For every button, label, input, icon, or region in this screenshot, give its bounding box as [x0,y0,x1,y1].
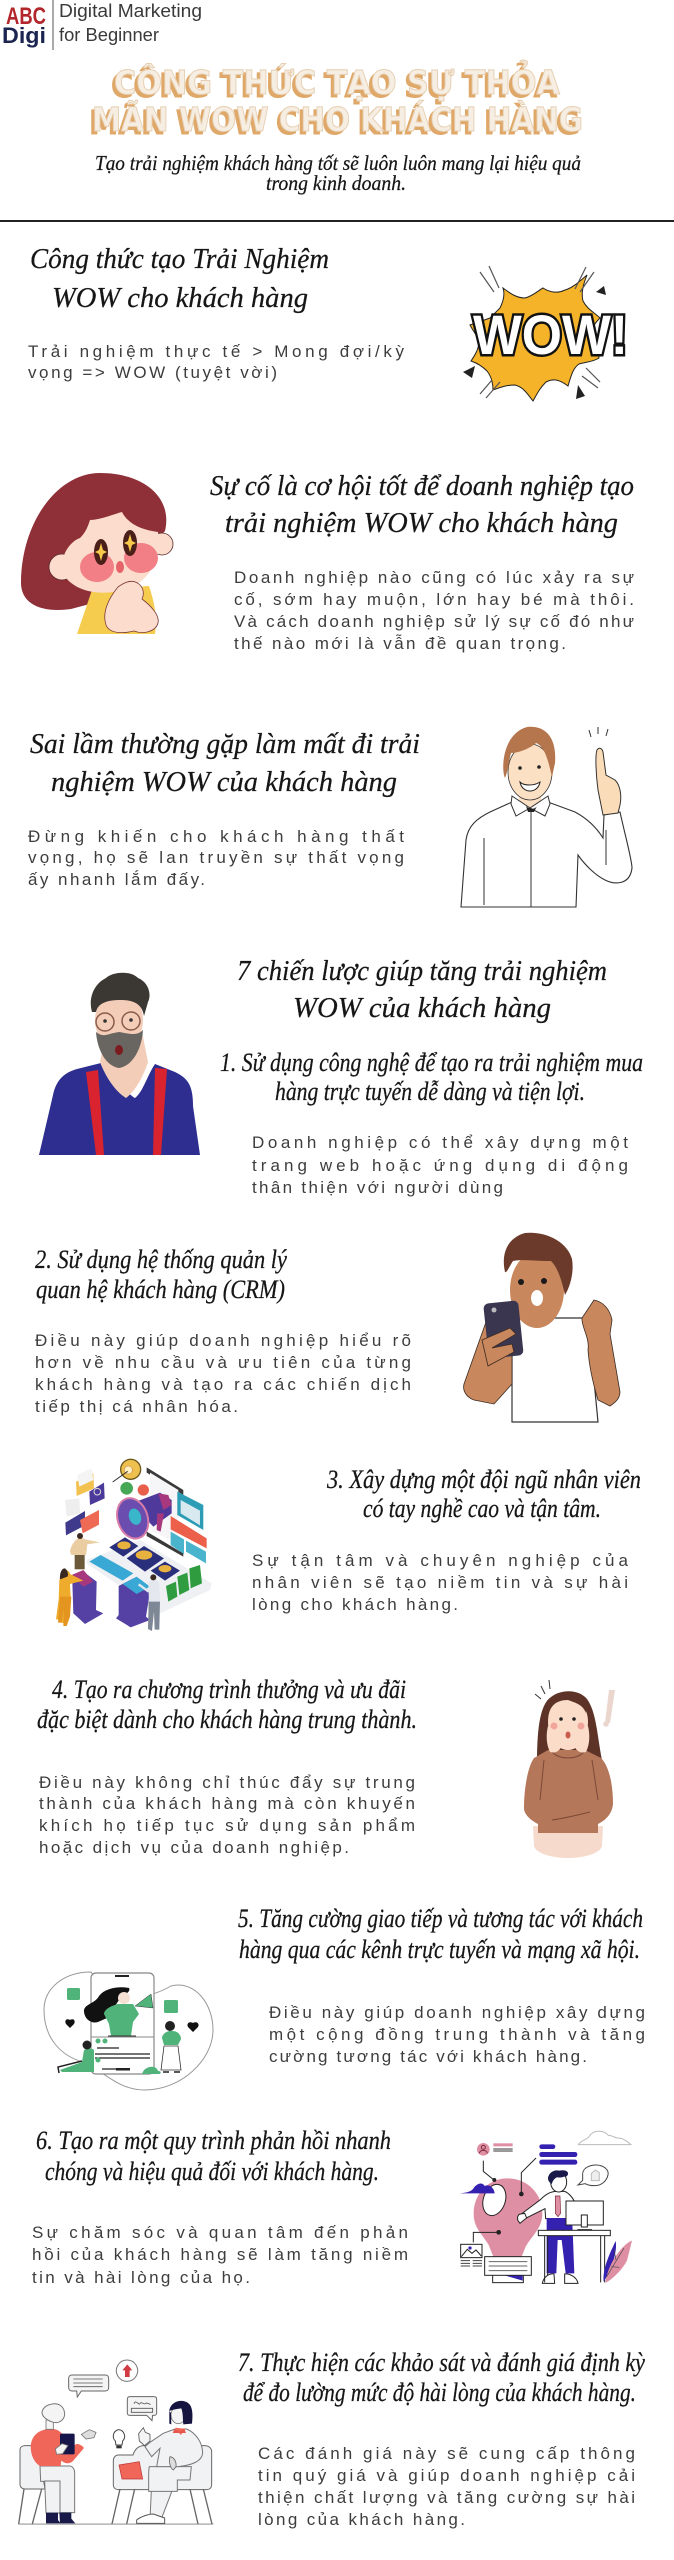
icon: WOW burst [463,266,628,401]
text: strategy 3: Sự tận tâm và chuyên nghiệp của [252,1551,629,1570]
illustration: two people talking [18,2360,213,2525]
text: strategy 6: tin và hài lòng của họ. [32,2268,250,2287]
heading: strategy 5 [238,1904,643,1964]
heading: common mistakes [30,728,420,798]
heading: WOW formula: Công thức tạo Trải Nghiệm [30,243,329,275]
text: strategy 4: khích họ tiếp tục sử dụng sản phẩm [39,1816,415,1835]
heading: strategy 3 [326,1465,641,1523]
heading: strategy 2: quan hệ khách hàng (CRM) [36,1275,285,1304]
text: strategy 7: Các đánh giá này sẽ cung cấp thông [258,2444,635,2463]
text: strategy 5: một cộng đồng trung thành và tăng [269,2025,645,2044]
text: strategy 4: hoặc dịch vụ của doanh nghiệp. [39,1838,349,1857]
text: incidents [234,568,634,653]
heading: strategy 1 [220,1048,643,1106]
logo: ABC Digi: for Beginner [59,24,159,45]
heading: strategy 4 [37,1675,417,1734]
heading: strategy 6: chóng và hiệu quả đối với khách hàng. [45,2157,379,2186]
heading: strategy 7 [238,2348,645,2407]
text: strategy 2 [35,1331,411,1416]
heading: strategy 1: hàng trực tuyến dễ dàng và tiện lợi. [275,1077,585,1106]
text: strategy 7: thiện chất lượng và tăng cường sự hài [258,2488,635,2507]
text: incidents: cố, sớm hay muộn, lớn hay bé mà thôi. [234,590,634,609]
heading: WOW formula: WOW cho khách hàng [52,282,308,314]
icon: WOW burst: WOW! [473,303,628,366]
heading: strategy 6: 6. Tạo ra một quy trình phản hồi nhanh [36,2126,391,2155]
title: MÃN WOW CHO KHÁCH HÀNG [92,99,583,139]
heading: common mistakes: Sai lầm thường gặp làm mất đi trải [30,728,420,760]
text: strategy 6 [32,2223,408,2287]
logo: ABC Digi: ABC [6,3,46,30]
divider [0,220,674,222]
subtitle: Tạo trải nghiệm khách hàng tốt sẽ luôn luôn mang lại hiệu quả [95,151,581,175]
text: WOW formula [28,342,404,382]
text: strategy 5: Điều này giúp doanh nghiệp xây dựng [269,2003,645,2022]
illustration: man pointing up [461,727,632,907]
text: strategy 3: lòng cho khách hàng. [252,1595,458,1614]
text: strategy 1: thân thiện với người dùng [252,1178,503,1197]
text: strategy 1 [252,1133,628,1197]
text: incidents: thế nào mới là vẫn đề quan trọng. [234,634,566,653]
text: strategy 5: cường tương tác với khách hàng. [269,2047,587,2066]
heading: strategy 4: 4. Tạo ra chương trình thưởng và ưu đãi [52,1675,406,1704]
text: strategy 2: khách hàng và tạo ra các chiến dịch [35,1375,411,1394]
text: strategy 2: hơn về nhu cầu và ưu tiên của từng [35,1353,411,1372]
text: common mistakes: Đừng khiến cho khách hàng thất [28,827,404,846]
text: strategy 2: tiếp thị cá nhân hóa. [35,1397,238,1416]
text: strategy 4: Điều này không chỉ thúc đẩy sự trung [39,1773,415,1792]
subtitle: trong kinh doanh. [266,171,406,195]
text: common mistakes [28,827,404,889]
illustration: surprised woman [524,1680,615,1858]
heading: strategy 4: đặc biệt dành cho khách hàng trung thành. [37,1705,417,1734]
heading: incidents as opportunities [210,471,634,539]
illustration: idea bulb [460,2131,632,2283]
text: strategy 7: lòng của khách hàng. [258,2510,465,2529]
text: strategy 3: nhân viên sẽ tạo niềm tin và sự hài [252,1573,628,1592]
text: WOW formula: Trải nghiệm thực tế > Mong đợi/kỳ [28,342,404,361]
title: CÔNG THỨC TẠO SỰ THỎA [114,59,560,102]
text: incidents: Và cách doanh nghiệp sử lý sự cố đó như [234,612,634,631]
heading: common mistakes: nghiệm WOW của khách hàng [51,766,397,798]
title [92,59,583,139]
illustration: girl with sparkling eyes [21,473,173,634]
text: strategy 6: Sự chăm sóc và quan tâm đến phản [32,2223,408,2242]
text: common mistakes: ấy nhanh lắm đấy. [28,870,205,889]
logo: ABC Digi [2,0,202,50]
illustration: man with phone [464,1233,620,1422]
heading: strategy 6 [36,2126,391,2186]
heading: 7 strategies: 7 chiến lược giúp tăng trải nghiệm [237,955,607,987]
heading: incidents as opportunities: trải nghiệm WOW cho khách hàng [225,508,618,539]
heading: WOW formula [30,243,329,314]
text: strategy 4 [39,1773,415,1857]
heading: 7 strategies: WOW của khách hàng [293,992,551,1024]
text: WOW formula: vọng => WOW (tuyệt vời) [28,363,277,382]
text: incidents: Doanh nghiệp nào cũng có lúc xảy ra sự [234,568,634,587]
text: strategy 6: hồi của khách hàng sẽ làm tăng niềm [32,2245,408,2264]
text: strategy 1: trang web hoặc ứng dụng di động [252,1156,628,1175]
text: strategy 2: Điều này giúp doanh nghiệp hiểu rõ [35,1331,411,1350]
text: strategy 1: Doanh nghiệp có thể xây dựng một [252,1133,628,1152]
illustration: isometric marketing [56,1459,212,1631]
heading: strategy 3: có tay nghề cao và tận tâm. [363,1494,601,1523]
heading: incidents as opportunities: Sự cố là cơ hội tốt để doanh nghiệp tạo [210,471,634,502]
heading: 7 strategies [237,955,607,1024]
text: common mistakes: vọng, họ sẽ lan truyền sự thất vọng [28,848,404,867]
text: strategy 7 [258,2444,635,2529]
logo: ABC Digi: Digi [2,23,46,48]
illustration: social media [44,1972,213,2090]
logo: ABC Digi: Digital Marketing [59,0,202,21]
text: strategy 4: thành của khách hàng mà còn khuyến [39,1794,415,1813]
heading: strategy 2 [35,1245,287,1304]
subtitle [95,151,581,195]
text: strategy 5 [269,2003,645,2066]
text: strategy 3 [252,1551,629,1614]
heading: strategy 2: 2. Sử dụng hệ thống quản lý [35,1245,287,1274]
illustration: bearded man [39,973,200,1155]
text: strategy 7: tin quý giá và giúp doanh nghiệp cải [258,2466,635,2485]
